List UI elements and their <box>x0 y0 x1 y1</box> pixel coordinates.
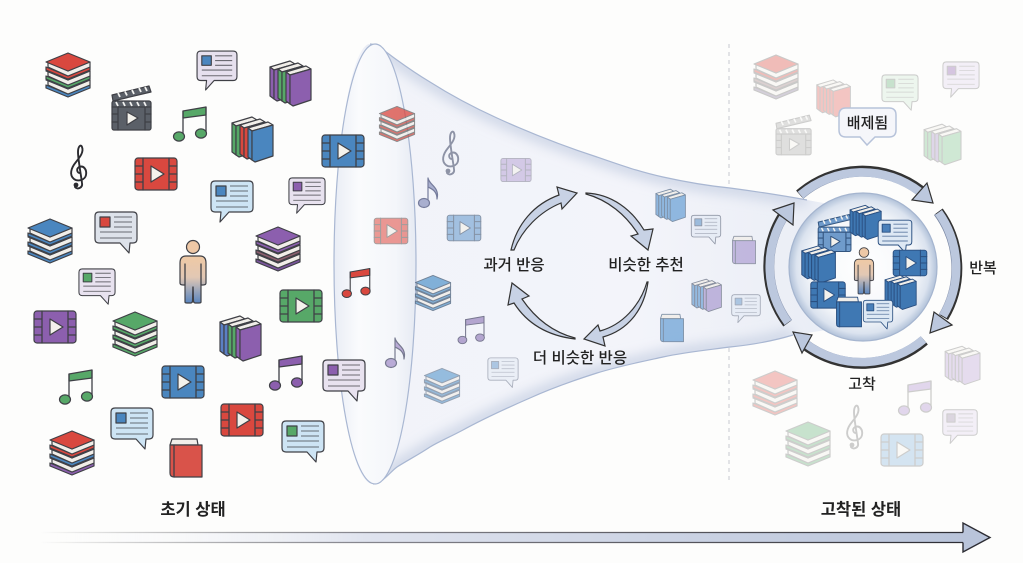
icon: treble clef <box>71 146 86 188</box>
icon: books blue lavender <box>692 279 721 312</box>
icon: bubble faded <box>488 358 518 387</box>
icon: bubble blue 3 <box>282 421 324 462</box>
icon: bubble blue 2 <box>111 408 153 449</box>
icon: video green <box>280 290 322 322</box>
icon: stack red <box>754 55 798 99</box>
arrow: left <box>768 203 794 324</box>
icon: books red <box>817 80 850 117</box>
icon: books green red blue <box>232 117 273 162</box>
icon: music note green 2 <box>60 370 92 404</box>
icon: book stack purple <box>256 227 300 271</box>
panel: filter funnel <box>334 44 840 484</box>
icon: note single <box>418 178 438 208</box>
icon: video blue faded <box>447 215 481 241</box>
icon: music note green <box>174 107 206 141</box>
panel: icons narrowing in funnel <box>374 106 760 404</box>
label: fixation: 고착 <box>848 376 876 393</box>
icon: video red 2 <box>221 404 263 436</box>
icon: bubble lavender <box>943 62 979 97</box>
icon: book stack blue <box>28 219 72 263</box>
panel: initial diverse content <box>28 51 370 477</box>
icon: single lavender book <box>732 236 756 264</box>
icon: bubble top right <box>878 220 912 253</box>
icon: clef grey <box>443 132 458 174</box>
icon: single red book <box>170 439 202 477</box>
icon: bubble lavender lower <box>943 410 977 443</box>
diagram: reinforcing feedback loop <box>483 187 684 367</box>
icon: bubble blue grey <box>691 215 721 244</box>
icon: person <box>180 240 206 303</box>
heading: fixated state: 고착된 상태 <box>821 500 901 519</box>
icon: note double lavender <box>458 316 484 344</box>
icon: books lavender <box>945 346 980 385</box>
sphere <box>789 193 937 341</box>
icon: clapperboard <box>112 86 151 130</box>
icon: video lavender <box>501 158 531 182</box>
arrow: right <box>930 211 958 333</box>
label: repeat: 반복 <box>969 260 997 277</box>
icon: music note purple <box>270 356 302 390</box>
callout: excluded <box>839 108 896 145</box>
icon: bubble lavender green <box>79 269 115 304</box>
icon: video blue <box>322 135 364 167</box>
icon: bubble blue <box>211 181 253 222</box>
icon: video red <box>135 158 177 190</box>
icon: book stack green <box>113 312 157 356</box>
icon: books blue <box>656 189 685 222</box>
icon: video blue 2 <box>162 366 204 398</box>
icon: books purple <box>270 61 311 106</box>
icon: book stack red <box>46 53 90 97</box>
icon: video red faded <box>374 218 408 244</box>
icon: bubble grey <box>95 212 137 253</box>
icon: clef faded <box>847 406 862 448</box>
panel: excluded faded content top <box>753 55 980 466</box>
icon: clapper in bubble <box>818 215 851 251</box>
icon: stack blue <box>415 275 451 311</box>
icon: person centre <box>854 248 874 294</box>
arrow: past to recommendation <box>511 187 577 250</box>
arrow: top <box>799 170 933 203</box>
icon: books green <box>924 124 961 165</box>
icon: stack red lower <box>753 371 797 415</box>
dashed divider <box>728 44 730 482</box>
icon: video purple <box>34 311 76 343</box>
icon: stack blue faded <box>424 368 460 404</box>
arrow: recommendation to response <box>586 193 653 250</box>
icon: clapper <box>776 115 811 155</box>
callout: excluded: 배제됨 <box>847 115 888 132</box>
icon: books blue green purple <box>220 316 261 361</box>
label: past reaction: 과거 반응 <box>483 256 545 274</box>
icon: video right <box>893 250 927 276</box>
icon: note lavender <box>898 381 932 415</box>
icon: bubble lavender <box>197 51 237 90</box>
arrow: more similar to past <box>508 283 575 339</box>
heading: initial state: 초기 상태 <box>160 500 226 519</box>
icon: video blue faded <box>881 434 923 466</box>
panel: filter bubble <box>789 193 937 341</box>
label: similar recommendation: 비슷한 추천 <box>608 256 684 274</box>
icon: books top <box>850 205 881 239</box>
icon: bubble purple at mouth <box>323 360 365 401</box>
icon: bubble lavender small <box>289 178 325 213</box>
icon: bubble small <box>732 295 760 323</box>
icon: single book <box>837 297 861 327</box>
icon: video lower left <box>811 282 845 308</box>
icon: books lower right <box>885 275 916 309</box>
funnel mouth <box>334 44 416 484</box>
icon: music note red <box>342 269 370 298</box>
icon: books left <box>802 246 835 283</box>
arrow: bottom <box>793 332 925 364</box>
icon: bubble lower <box>863 300 893 329</box>
icon: single blue book <box>660 314 684 342</box>
cycle arrows around bubble <box>768 170 958 364</box>
arrow: timeline <box>40 523 990 552</box>
icon: book stack mixed <box>50 431 94 475</box>
arrow: similar recommendation to more similar <box>584 282 648 346</box>
icon: stack green <box>786 422 830 466</box>
icon: bubble green <box>882 75 918 110</box>
icon: note single lavender <box>386 338 405 368</box>
label: more similar reaction: 더 비슷한 반응 <box>533 349 627 367</box>
icon: stack red faded <box>379 106 415 142</box>
